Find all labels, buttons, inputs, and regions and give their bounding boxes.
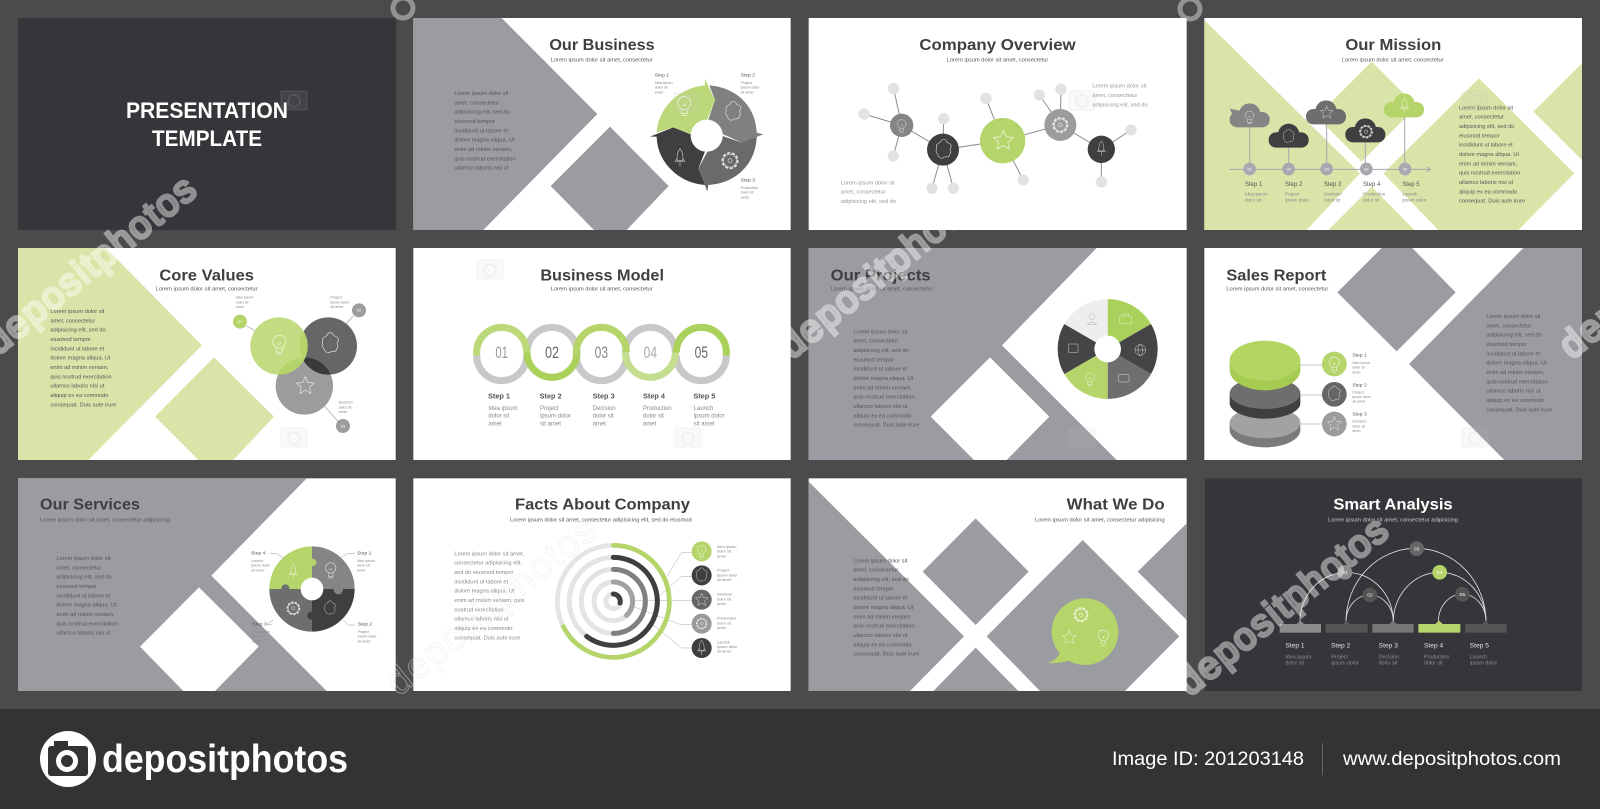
body text: aliquip ex ea commodo bbox=[1459, 189, 1517, 195]
step labels: Step 2 bbox=[1352, 383, 1367, 389]
body text: ullamco laboris nisi ut bbox=[454, 617, 509, 623]
step labels: Step 2 bbox=[1285, 182, 1303, 188]
icon list: sit amet bbox=[717, 649, 732, 654]
step labels: Launch bbox=[1470, 654, 1487, 660]
step labels: Decision bbox=[593, 406, 616, 412]
step labels: Idea ipsum bbox=[1285, 654, 1312, 660]
body text: adipisicing elit, sed do bbox=[56, 575, 112, 581]
body text: dolore magna aliqua. Ut bbox=[853, 376, 914, 382]
step labels: dolor sit bbox=[1363, 197, 1380, 202]
slide: our business bbox=[413, 18, 791, 230]
step labels: ipsum dolor bbox=[1470, 661, 1497, 667]
step labels: amet bbox=[357, 568, 365, 572]
slide: what we do bbox=[809, 478, 1187, 691]
body text: eiusmod tempor bbox=[56, 584, 97, 590]
body text: consequat. Duis aute irure bbox=[853, 652, 919, 658]
step labels: sit amet bbox=[251, 568, 264, 572]
arc diagram: 03 bbox=[1414, 546, 1420, 552]
venn diagram: 01 bbox=[238, 319, 243, 324]
step labels: Idea ipsum bbox=[655, 81, 673, 85]
website url: www.depositphotos.com bbox=[1342, 749, 1561, 770]
step labels: amet bbox=[593, 421, 606, 427]
text notes: adipisicing elit, sed do bbox=[841, 199, 896, 205]
speech bubble bbox=[1047, 598, 1118, 665]
heading: Core Values bbox=[159, 268, 254, 285]
step labels: Step 1 bbox=[1245, 182, 1263, 188]
body text: consequat. Duis aute irure bbox=[454, 635, 520, 641]
step labels: Step 4 bbox=[1363, 182, 1381, 188]
venn diagram bbox=[233, 303, 366, 433]
step labels: Step 5 bbox=[1402, 182, 1420, 188]
body text: Lorem ipsum dolor sit bbox=[1459, 105, 1513, 111]
slide: our services bbox=[18, 478, 396, 691]
venn diagram: 03 bbox=[341, 423, 346, 428]
cloud timeline: 02 bbox=[1286, 166, 1292, 171]
step labels: amet bbox=[655, 90, 663, 94]
text notes: amet, consectetur bbox=[1092, 93, 1137, 99]
body text: quis nostrud exercitation bbox=[50, 374, 112, 380]
step labels bbox=[251, 551, 377, 643]
body text: dolore magna aliqua. Ut bbox=[454, 138, 515, 144]
arc diagram: 04 bbox=[1437, 570, 1443, 576]
body text: Lorem ipsum dolor sit bbox=[853, 558, 908, 564]
body text: Lorem ipsum dolor sit bbox=[454, 91, 509, 97]
body text: nostrud exercitation bbox=[454, 607, 504, 613]
icon list: amet bbox=[717, 601, 727, 606]
body text: dolore magna aliqua. Ut bbox=[56, 603, 117, 609]
body text: Lorem ipsum dolor sit bbox=[56, 556, 111, 562]
cloud timeline: 05 bbox=[1403, 166, 1408, 171]
step labels: Step 1 bbox=[357, 551, 372, 557]
ring numbers: 03 bbox=[595, 343, 608, 362]
text notes: amet, consectetur bbox=[841, 190, 886, 196]
arc diagram: 05 bbox=[1460, 592, 1465, 598]
body text: amet, consectetur bbox=[56, 565, 101, 571]
body text: consequat. Duis aute irure bbox=[853, 423, 919, 429]
step labels: dolor sit bbox=[1245, 197, 1262, 202]
step labels: sit amet bbox=[358, 639, 370, 643]
body text: aliquip ex ea commodo bbox=[853, 642, 912, 648]
step labels: ipsum dolor bbox=[358, 635, 377, 639]
logo wordmark: depositphotos bbox=[102, 738, 348, 781]
slide: facts about company bbox=[413, 478, 791, 691]
step notes: Idea ipsum bbox=[236, 296, 254, 300]
step notes: Project bbox=[330, 296, 342, 300]
step labels: Step 2 bbox=[1331, 643, 1351, 650]
watermark text: depositphotos bbox=[1169, 509, 1396, 704]
heading: Our Projects bbox=[831, 268, 931, 285]
watermark text bbox=[0, 168, 1600, 704]
step notes: amet bbox=[236, 305, 244, 309]
step labels: dolor sit bbox=[1285, 661, 1305, 667]
slide: facts about company: Lorem ipsum dolor sit amet, consectetur adipisicing elit, sed do eiusmod bbox=[510, 518, 692, 524]
icon list: Project bbox=[717, 568, 730, 573]
step labels: Step 4 bbox=[1424, 643, 1444, 650]
slide: business model bbox=[413, 248, 791, 460]
ring numbers: 04 bbox=[644, 343, 657, 362]
body text: quis nostrud exercitation bbox=[1486, 379, 1548, 385]
slide: our mission: Lorem ipsum dolor sit amet, consectetur bbox=[1342, 57, 1444, 63]
body text: enim ad minim veniam, quis bbox=[454, 598, 525, 604]
body text: ullamco laboris nisi ut bbox=[1459, 180, 1513, 186]
step labels: Step 1 bbox=[1352, 353, 1367, 359]
step notes bbox=[236, 296, 353, 414]
text notes: adipisicing elit, sed do bbox=[1092, 102, 1148, 108]
step labels: Step 1 bbox=[655, 73, 669, 79]
logo mark bbox=[40, 731, 96, 787]
step labels: amet bbox=[643, 421, 657, 427]
body text: eiusmod tempor bbox=[853, 357, 894, 363]
body text: dolore magna aliqua. Ut bbox=[853, 605, 914, 611]
step labels: Project bbox=[741, 81, 752, 85]
step labels: ipsum dolor bbox=[1285, 197, 1310, 202]
step labels: Idea ipsum bbox=[357, 559, 375, 563]
body text: ullamco laboris nisi ut bbox=[853, 633, 908, 639]
step labels: Step 3 bbox=[741, 178, 755, 184]
slide: company overview: Lorem ipsum dolor sit amet, consectetur bbox=[947, 57, 1049, 63]
ring numbers: 05 bbox=[695, 343, 708, 362]
body text: adipisicing elit, sed do bbox=[853, 577, 909, 583]
body text: quis nostrud exercitation bbox=[1459, 171, 1520, 177]
heading: Our Mission bbox=[1345, 37, 1441, 54]
step notes: dolor sit bbox=[236, 300, 248, 304]
body text: Lorem ipsum dolor sit bbox=[1486, 314, 1541, 320]
body text: amet, consectetur bbox=[853, 339, 898, 345]
body text: ullamco laboris nisi ut bbox=[56, 631, 111, 637]
body text: amet, consectetur bbox=[1459, 115, 1504, 121]
icon list: amet bbox=[717, 553, 727, 558]
body text: consequat. Duis aute irure bbox=[50, 402, 116, 408]
step labels: dolor sit bbox=[655, 86, 667, 90]
step labels bbox=[1352, 353, 1372, 433]
step labels: ipsum dolor bbox=[694, 414, 725, 420]
step labels: Idea ipsum bbox=[488, 406, 518, 412]
slide: core values bbox=[18, 248, 396, 460]
slide: sales report bbox=[1204, 248, 1582, 460]
body text: amet, consectetur bbox=[1486, 323, 1531, 329]
slide: sales report: Lorem ipsum dolor sit amet, consectetur bbox=[1226, 286, 1329, 292]
cloud timeline: 04 bbox=[1364, 166, 1369, 171]
body text: adipisicing elit, sed do bbox=[853, 348, 909, 354]
step labels bbox=[1245, 182, 1427, 202]
step labels: Step 3 bbox=[593, 392, 615, 401]
icon list: Launch bbox=[717, 639, 730, 644]
body text: eiusmod tempor bbox=[50, 337, 91, 343]
heading: What We Do bbox=[1067, 497, 1165, 514]
venn diagram: 02 bbox=[357, 308, 362, 313]
body text: incididunt ut labore et bbox=[853, 367, 908, 373]
step labels: dolor sit bbox=[643, 414, 664, 420]
step labels: dolor sit bbox=[1352, 424, 1365, 428]
step notes: amet bbox=[339, 410, 347, 414]
step labels: Step 1 bbox=[1285, 643, 1305, 650]
slide: our mission bbox=[1204, 18, 1582, 230]
slide: our projects: Lorem ipsum dolor sit amet, consectetur bbox=[831, 286, 933, 292]
circular arrow chart bbox=[650, 79, 763, 192]
step labels: ipsum dolor bbox=[741, 86, 760, 90]
body text: amet, consectetur bbox=[50, 318, 95, 324]
body text: aliquip ex ea commodo bbox=[454, 626, 513, 632]
body text: aliquip ex ea commodo bbox=[853, 413, 912, 419]
step notes: dolor sit bbox=[339, 405, 351, 409]
icon list: Decision bbox=[717, 592, 732, 597]
icon list: Idea ipsum bbox=[717, 544, 737, 549]
step labels: Step 3 bbox=[1379, 643, 1398, 650]
step labels: amet bbox=[1352, 370, 1360, 374]
step labels: Step 4 bbox=[251, 551, 266, 557]
step labels: amet bbox=[741, 195, 749, 199]
step labels: dolor sit bbox=[593, 414, 614, 420]
step labels: Step 2 bbox=[741, 73, 755, 79]
slide: smart analysis: Lorem ipsum dolor sit amet, consectetur adipisicing bbox=[1328, 518, 1458, 524]
body text: aliquip ex ea commodo bbox=[1486, 398, 1545, 404]
icon list: dolor sit bbox=[717, 596, 732, 601]
body text: dolore magna aliqua. Ut bbox=[50, 356, 111, 362]
slide: our services: Lorem ipsum dolor sit amet, consectetur adipisicing bbox=[40, 518, 170, 524]
step labels: Decision bbox=[1379, 654, 1399, 660]
body text: quis nostrud exercitation bbox=[56, 621, 118, 627]
slide: business model: Lorem ipsum dolor sit amet, consectetur bbox=[551, 286, 653, 292]
slide: core values: Lorem ipsum dolor sit amet, consectetur bbox=[156, 286, 258, 292]
icon list: ipsum dolor bbox=[717, 644, 738, 649]
step labels: Step 4 bbox=[643, 392, 666, 401]
step labels bbox=[655, 73, 760, 199]
step labels: sit amet bbox=[540, 421, 561, 427]
step labels: Production bbox=[741, 186, 758, 190]
step labels: Step 3 bbox=[1324, 182, 1342, 188]
body text: consequat. Duis aute irure bbox=[1486, 407, 1552, 413]
interlocking rings bbox=[477, 327, 726, 381]
step labels: Idea ipsum bbox=[1352, 361, 1370, 365]
step labels: Step 2 bbox=[358, 622, 372, 628]
body text: quis nostrud exercitation bbox=[454, 156, 516, 162]
step labels: dolor sit bbox=[357, 564, 370, 568]
step labels: Project bbox=[540, 406, 559, 412]
icon list: dolor sit bbox=[717, 620, 732, 625]
step labels: ipsum dolor bbox=[1331, 661, 1359, 667]
body text: enim ad minim veniam, bbox=[50, 365, 109, 371]
step labels: dolor sit bbox=[1379, 661, 1398, 667]
step labels: Project bbox=[1331, 654, 1348, 660]
step labels: Launch bbox=[251, 559, 263, 563]
body text: sed do eiusmod tempor bbox=[454, 570, 514, 576]
arc diagram: 01 bbox=[1342, 570, 1348, 576]
step labels: Step 5 bbox=[693, 392, 715, 401]
body text: dolore magna aliqua. Ut bbox=[454, 589, 515, 595]
step labels: amet bbox=[488, 421, 502, 427]
watermark text: depositphotos bbox=[378, 509, 605, 704]
text notes bbox=[841, 84, 1148, 205]
step labels: dolor sit bbox=[1352, 366, 1365, 370]
icon list: sit amet bbox=[717, 577, 732, 582]
step labels bbox=[488, 392, 725, 427]
heading: Our Business bbox=[549, 37, 655, 54]
body text: incididunt ut labore et bbox=[56, 593, 111, 599]
body text: eiusmod tempor bbox=[853, 586, 894, 592]
body text: consequat. Duis aute irure bbox=[1459, 199, 1525, 205]
body text: enim ad minim veniam, bbox=[56, 612, 115, 618]
step labels: Production bbox=[252, 630, 270, 634]
body text: incididunt ut labore et bbox=[853, 596, 908, 602]
footer bar bbox=[0, 709, 1600, 809]
slide: what we do: Lorem ipsum dolor sit amet, consectetur adipisicing bbox=[1035, 518, 1165, 524]
image id: Image ID: 201203148 bbox=[1112, 749, 1304, 770]
step labels: Step 3 bbox=[252, 622, 267, 628]
cloud timeline bbox=[1229, 93, 1431, 175]
slide: our projects bbox=[809, 248, 1187, 460]
body text: ullamco laboris nisi ut bbox=[454, 166, 509, 172]
body text: ullamco laboris nisi ut bbox=[50, 384, 105, 390]
body text: adipisicing elit, sed do bbox=[1486, 333, 1542, 339]
ring numbers: 02 bbox=[545, 343, 559, 362]
body text: eiusmod tempor bbox=[1459, 133, 1500, 139]
step labels: sit amet bbox=[1352, 400, 1365, 404]
ring numbers bbox=[495, 343, 708, 362]
body text: dolore magna aliqua. Ut bbox=[1459, 152, 1519, 158]
step labels: Production bbox=[1363, 191, 1386, 196]
step labels: Project bbox=[358, 630, 369, 634]
text notes: Lorem ipsum dolor sit bbox=[841, 180, 895, 186]
heading: Facts About Company bbox=[515, 497, 691, 514]
step labels: amet bbox=[1352, 429, 1360, 433]
step labels: Project bbox=[1285, 191, 1300, 196]
arc diagram: 02 bbox=[1367, 593, 1373, 599]
step labels: Project bbox=[1352, 390, 1364, 394]
cloud timeline: 03 bbox=[1324, 166, 1330, 171]
body text: adipisicing elit, sed do bbox=[454, 110, 510, 116]
step labels: Decision bbox=[1352, 420, 1366, 424]
icon list bbox=[692, 541, 738, 658]
body text: aliquip ex ea commodo bbox=[50, 393, 109, 399]
heading: Company Overview bbox=[919, 37, 1076, 54]
slide: presentation template cover: TEMPLATE bbox=[152, 126, 262, 151]
body text: enim ad minim veniam, bbox=[853, 614, 912, 620]
slide: our business: Lorem ipsum dolor sit amet, consectetur bbox=[551, 57, 653, 63]
icon list: amet bbox=[717, 625, 727, 630]
body text: Lorem ipsum dolor sit bbox=[50, 309, 105, 315]
icon list: ipsum dolor bbox=[717, 572, 738, 577]
body text: quis nostrud exercitation bbox=[853, 395, 915, 401]
puzzle donut chart bbox=[267, 546, 355, 632]
heading: Smart Analysis bbox=[1333, 497, 1453, 514]
body text: quis nostrud exercitation bbox=[853, 624, 915, 630]
step labels: Step 5 bbox=[1470, 643, 1489, 650]
step labels: dolor sit bbox=[488, 414, 510, 420]
body text: eiusmod tempor bbox=[1486, 342, 1527, 348]
body text: enim ad minim veniam, bbox=[853, 385, 912, 391]
body text: adipisicing elit, sed do bbox=[50, 328, 106, 334]
heading: Business Model bbox=[540, 268, 664, 285]
arc diagram bbox=[1280, 541, 1507, 633]
step labels: Production bbox=[1424, 654, 1450, 660]
body text: ullamco laboris nisi ut bbox=[1486, 389, 1541, 395]
body text: enim ad minim veniam, bbox=[1459, 161, 1518, 167]
segmented donut chart bbox=[1058, 299, 1158, 399]
body text: Lorem ipsum dolor sit bbox=[853, 329, 908, 335]
radial progress chart bbox=[557, 545, 692, 657]
step notes: Decision bbox=[339, 401, 353, 405]
step labels: dolor sit bbox=[741, 191, 753, 195]
heading: Our Services bbox=[40, 497, 140, 514]
step labels: dolor sit bbox=[1424, 661, 1443, 667]
step labels: ipsum dolor bbox=[540, 414, 571, 420]
body text: consectetur adipisicing elit, bbox=[454, 561, 522, 567]
step labels: Launch bbox=[694, 406, 713, 412]
body text: enim ad minim veniam, bbox=[1486, 370, 1545, 376]
cloud timeline: 01 bbox=[1247, 166, 1253, 171]
body text: eiusmod tempor bbox=[454, 119, 495, 125]
body text: ullamco laboris nisi ut bbox=[853, 404, 908, 410]
body text: dolore magna aliqua. Ut bbox=[1486, 361, 1547, 367]
step labels: Idea ipsum bbox=[1245, 191, 1268, 196]
step labels: Step 2 bbox=[540, 392, 562, 401]
molecule diagram bbox=[858, 83, 1137, 194]
icon list: dolor sit bbox=[717, 549, 732, 554]
ring numbers: 01 bbox=[495, 343, 508, 362]
step notes: sit amet bbox=[330, 305, 343, 309]
body text: adipisicing elit, sed do bbox=[1459, 124, 1514, 130]
step labels: amet bbox=[252, 639, 260, 643]
text notes: Lorem ipsum dolor sit bbox=[1092, 84, 1147, 90]
body text: Lorem ipsum dolor sit amet, bbox=[454, 551, 525, 557]
step labels: ipsum dolor bbox=[1352, 395, 1372, 399]
slide: presentation template cover bbox=[18, 18, 396, 230]
body text: amet, consectetur bbox=[454, 100, 499, 106]
body text: enim ad minim veniam, bbox=[454, 147, 513, 153]
slide: smart analysis bbox=[1205, 478, 1582, 691]
step labels: ipsum dolor bbox=[1402, 197, 1427, 202]
watermark text: depositphotos bbox=[771, 172, 998, 367]
cover title: PRESENTATION bbox=[126, 98, 288, 123]
body text: incididunt ut labore et bbox=[50, 346, 105, 352]
step labels: Decision bbox=[1324, 191, 1342, 196]
slide: company overview bbox=[809, 18, 1187, 230]
heading: Sales Report bbox=[1226, 268, 1326, 285]
step labels: sit amet bbox=[694, 421, 715, 427]
step labels: Production bbox=[643, 406, 672, 412]
body text: incididunt ut labore et bbox=[1486, 351, 1541, 357]
step labels: Launch bbox=[1402, 191, 1418, 196]
body text: incididunt ut labore et bbox=[454, 579, 509, 585]
step labels: ipsum dolor bbox=[251, 564, 271, 568]
step labels bbox=[1285, 643, 1497, 667]
icon list: Production bbox=[717, 616, 736, 621]
step labels: sit amet bbox=[741, 90, 753, 94]
step labels: dolor sit bbox=[1324, 197, 1341, 202]
step notes: ipsum dolor bbox=[330, 300, 350, 304]
stacked cylinders bbox=[1230, 341, 1347, 447]
body text: incididunt ut labore et bbox=[1459, 143, 1513, 149]
body text: incididunt ut labore et bbox=[454, 128, 509, 134]
body text: amet, consectetur bbox=[853, 568, 898, 574]
step labels: dolor sit bbox=[252, 635, 265, 639]
step labels: Step 3 bbox=[1352, 412, 1367, 418]
step labels: Step 1 bbox=[488, 392, 510, 401]
